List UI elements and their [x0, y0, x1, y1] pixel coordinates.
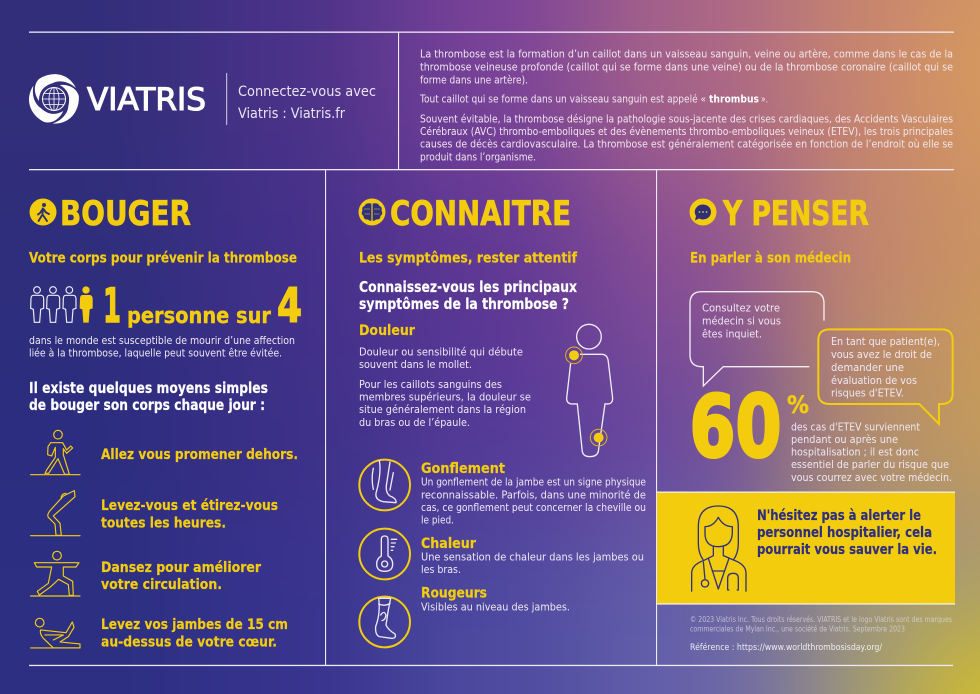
- symptom: gonflement: reconnaissable. Parfois, dans une minorité de: [421, 488, 646, 502]
- statistic description: hospitalisation ; il est donc: [791, 446, 919, 458]
- speech bubble: consultez: Consultez votre: [702, 302, 780, 314]
- intro text block: produit dans l’organisme.: [420, 152, 536, 164]
- panel: bouger: [29, 194, 302, 650]
- label: au-dessus de votre cœur.: [101, 634, 277, 650]
- symptom: rougeurs: Rougeurs: [421, 586, 487, 602]
- statistic: 1 personne sur 4: 4: [277, 279, 302, 334]
- intro question: Il existe quelques moyens simples: [29, 380, 268, 397]
- activity: stretch: [31, 491, 278, 536]
- intro question: [29, 380, 268, 414]
- speech bubble: consultez: êtes inquiet.: [702, 328, 762, 340]
- subheading: Les symptômes, rester attentif: [359, 250, 578, 266]
- speech bubble: patient rights: demander une: [831, 361, 904, 374]
- connect text: [238, 84, 376, 122]
- statistic: 1 personne sur 4: 1: [103, 279, 121, 334]
- speech bubble: patient rights: évaluation de vos: [831, 374, 917, 387]
- label: Allez vous promener dehors.: [101, 447, 298, 463]
- label: Levez vos jambes de 15 cm: [101, 617, 288, 633]
- symptom: douleur: Pour les caillots sanguins des: [359, 378, 502, 391]
- label: [101, 617, 288, 650]
- panel: y penser: [657, 194, 955, 653]
- intro question: de bouger son corps chaque jour :: [29, 397, 265, 414]
- question: Connaissez-vous les principaux: [359, 279, 577, 296]
- statistic description: essentiel de parler du risque que: [791, 458, 949, 471]
- label: votre circulation.: [101, 577, 222, 593]
- statistic description: pendant ou après une: [791, 433, 898, 446]
- intro text block: thrombus: [709, 94, 759, 106]
- statistic: 1 personne sur 4: [103, 279, 302, 334]
- symptom: gonflement: le pied.: [421, 514, 454, 526]
- statistic description: dans le monde est susceptible de mourir d’une affection: [29, 334, 295, 347]
- statistic description: vous courrez avec votre médecin.: [791, 471, 952, 484]
- symptom: gonflement: [359, 460, 646, 526]
- symptom: douleur: situe généralement dans la région: [359, 403, 526, 416]
- icon: globe swirl: [21, 74, 85, 131]
- icon: walking person badge: [30, 198, 56, 226]
- heading: y penser: Y PENSER: [722, 194, 869, 234]
- icon: four people, one highlighted: [31, 286, 93, 323]
- icon: chat bubble badge: [690, 198, 716, 226]
- intro text block: [419, 48, 953, 164]
- statistic: 60%: %: [787, 391, 809, 419]
- heading: connaitre: CONNAITRE: [390, 194, 571, 234]
- symptom: rougeurs: [359, 586, 570, 647]
- logo: Viatris: [21, 74, 206, 131]
- copyright and reference: commerciales de Mylan Inc., une société de Viatris. Septembre 2023: [690, 624, 905, 634]
- symptom: gonflement: Un gonflement de la jambe est un signe physique: [421, 476, 646, 488]
- symptom: douleur: souvent dans le mollet.: [359, 358, 472, 371]
- speech bubble: consultez: [690, 292, 824, 386]
- icon: swollen leg: [359, 460, 410, 510]
- symptom: douleur: Douleur: [359, 323, 416, 339]
- copyright and reference: Référence : https://www.worldthrombosisday.org/: [690, 642, 882, 653]
- icon: doctor: [692, 506, 746, 592]
- label: toutes les heures.: [101, 516, 226, 532]
- subheading: Votre corps pour prévenir la thrombose: [29, 250, 297, 266]
- statistic description: liée à la thrombose, laquelle peut souvent être évitée.: [29, 346, 282, 360]
- statistic: 60%: 60: [690, 378, 782, 478]
- symptom: gonflement: Gonflement: [421, 461, 505, 477]
- symptom: rougeurs: Visibles au niveau des jambes.: [421, 600, 570, 614]
- heading: bouger: BOUGER: [60, 194, 191, 234]
- label: [101, 560, 262, 593]
- statistic description: [29, 334, 295, 360]
- connect text: Viatris : Viatris.fr: [238, 106, 345, 122]
- symptom: chaleur: Chaleur: [421, 536, 477, 552]
- icon: dancing figure: [31, 551, 80, 596]
- icon: brain badge: [358, 198, 386, 226]
- panel: connaitre: [358, 194, 646, 647]
- symptom: douleur: Douleur ou sensibilité qui débute: [359, 346, 523, 358]
- speech bubble: patient rights: vous avez le droit de: [831, 348, 932, 361]
- symptom: chaleur: Une sensation de chaleur dans les jambes ou: [421, 550, 644, 564]
- subheading: En parler à son médecin: [690, 250, 851, 266]
- callout text: [757, 508, 937, 558]
- wordmark: VIATRIS: [87, 82, 206, 118]
- speech bubble: patient rights: [818, 329, 953, 424]
- statistic description: [791, 420, 952, 484]
- speech bubble: patient rights: En tant que patient(e),: [831, 335, 940, 348]
- callout text: personnel hospitalier, cela: [757, 525, 932, 541]
- callout text: N'hésitez pas à alerter le: [757, 508, 921, 524]
- activity: legs raised: [31, 617, 288, 650]
- speech bubble: patient rights: risques d'ETEV.: [831, 386, 904, 400]
- symptom: douleur: [359, 323, 531, 429]
- callout text: pourrait vous sauver la vie.: [757, 542, 937, 558]
- copyright and reference: [690, 615, 952, 653]
- intro text block: Tout caillot qui se forme dans un vaisseau sanguin est appelé «: [419, 94, 706, 106]
- icon: walking figure: [31, 430, 80, 475]
- icon: body with pain points: [566, 324, 613, 457]
- symptom: chaleur: les bras.: [421, 563, 461, 576]
- symptom: chaleur: [359, 529, 644, 579]
- label: Levez-vous et étirez-vous: [101, 498, 278, 514]
- question: [359, 279, 577, 313]
- symptom: douleur: membres supérieurs, la douleur se: [359, 390, 531, 404]
- activity: walk: [31, 430, 298, 475]
- label: [101, 498, 278, 532]
- icon: legs raised figure: [31, 618, 80, 648]
- statistic description: des cas d'ETEV surviennent: [791, 420, 920, 434]
- callout: alert staff: [657, 492, 955, 605]
- intro text block: forme dans une artère).: [420, 74, 528, 86]
- intro text block: ».: [761, 94, 768, 106]
- symptom: douleur: du bras ou de l’épaule.: [359, 416, 470, 429]
- speech bubble: consultez: médecin si vous: [702, 314, 781, 328]
- icon: stretching figure: [31, 491, 80, 536]
- symptom: gonflement: cas, ce gonflement peut concerner la cheville ou: [421, 501, 646, 514]
- question: symptômes de la thrombose ?: [359, 296, 569, 313]
- activity: dance: [31, 551, 262, 596]
- label: Dansez pour améliorer: [101, 560, 262, 576]
- statistic: 1 personne sur 4: personne sur: [127, 304, 271, 329]
- icon: red leg: [359, 597, 410, 647]
- icon: thermometer: [359, 529, 410, 579]
- connect text: Connectez-vous avec: [238, 84, 376, 100]
